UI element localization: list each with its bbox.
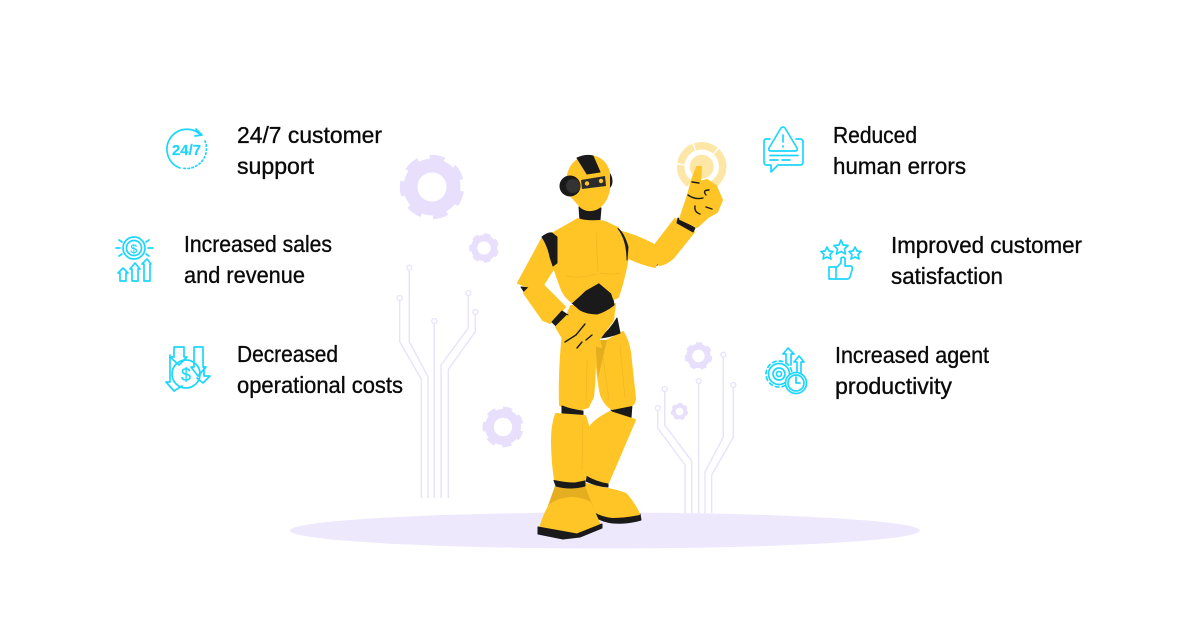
benefit: 24/7 customer support: 24/7 customer [237,122,382,148]
robot pelvis and waist [560,282,615,338]
benefit: increased sales and revenue [116,231,332,288]
icon: coin with rising arrows: $ [130,242,138,256]
benefit: reduced human errors: Reduced [833,122,917,148]
icon: stars with thumbs up [821,240,861,279]
icon: warning speech bubble [764,127,803,172]
robot right arm [622,167,722,267]
benefit: reduced human errors [764,122,966,179]
icon: gear, clock and arrows [766,348,806,394]
benefit: decreased operational costs [166,341,403,398]
robot [518,155,722,539]
robot head [560,155,612,210]
icon: 24/7 clock: 24/7 [172,142,201,159]
icon: 24/7 clock [167,129,206,169]
benefit: improved customer satisfaction: Improved customer [891,232,1082,258]
robot right leg [586,318,641,523]
benefit: decreased operational costs: operational costs [237,372,403,398]
circuit lines left [397,265,478,498]
benefit: improved customer satisfaction: satisfaction [891,263,1003,289]
benefit: increased agent productivity [766,342,990,399]
benefit: decreased operational costs: Decreased [237,341,338,367]
benefit: increased sales and revenue: Increased sales [184,231,332,257]
benefit: increased agent productivity: productivity [835,373,952,399]
benefit: 24/7 customer support: support [237,153,315,179]
icon: coin with falling arrows: $ [181,365,191,385]
benefit: increased sales and revenue: and revenue [184,262,305,288]
robot left arm [518,233,601,363]
benefit: reduced human errors: human errors [833,153,966,179]
benefit: increased agent productivity: Increased agent [835,342,990,368]
ground ellipse [290,512,920,548]
circuit lines right [655,352,736,513]
icon: coin with rising arrows [116,237,153,281]
icon: coin with falling arrows [166,347,210,391]
benefit: improved customer satisfaction [821,232,1082,289]
robot left leg [538,333,602,539]
touch target glow [681,146,723,188]
robot torso [553,207,628,302]
gears background [399,154,711,449]
benefit: 24/7 customer support [167,122,382,179]
